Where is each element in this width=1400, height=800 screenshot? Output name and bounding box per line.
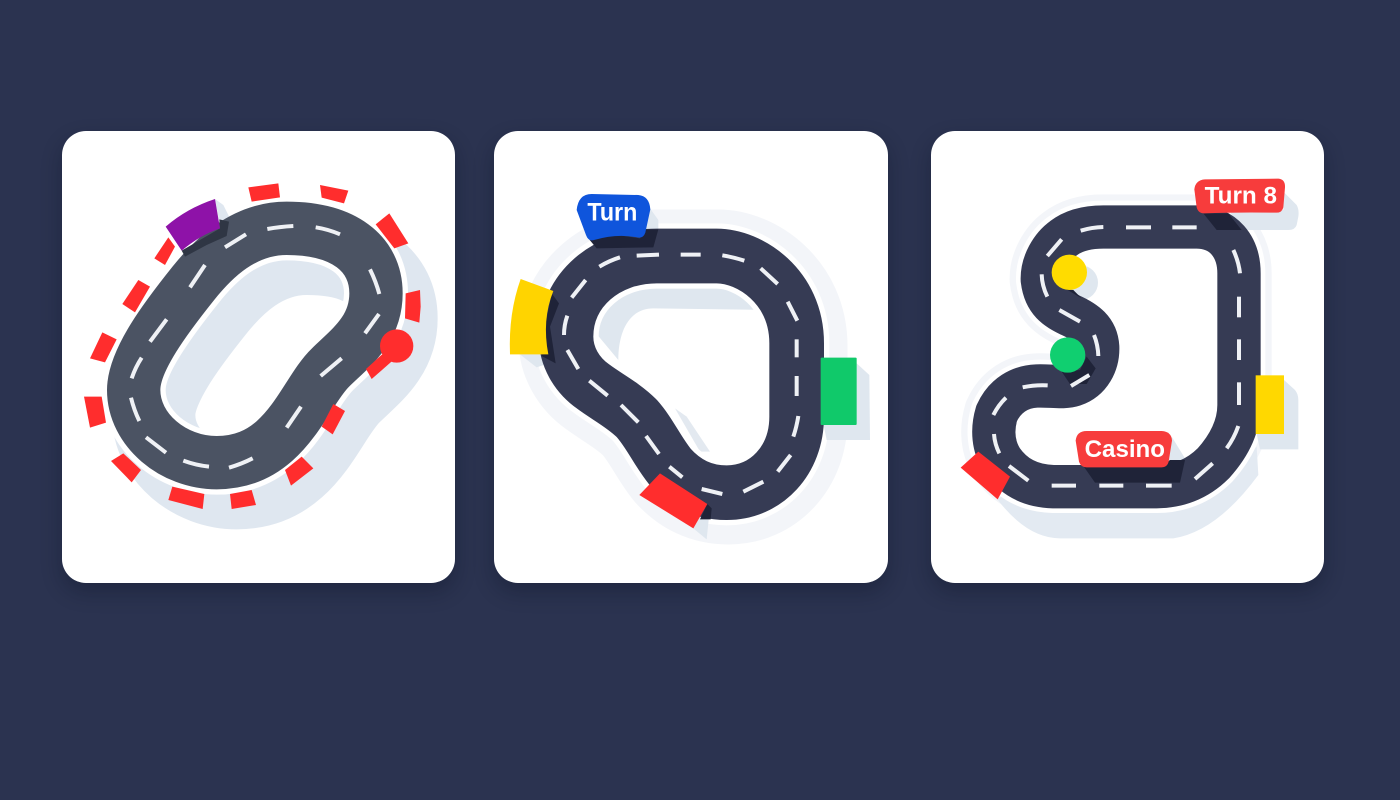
white track halo <box>134 228 376 463</box>
road <box>994 227 1239 487</box>
infield fill <box>566 256 797 493</box>
lane dashes <box>564 255 798 494</box>
sticker shadows on road <box>542 229 712 519</box>
red Casino label <box>1076 431 1172 467</box>
infield shadow sliver <box>675 408 710 452</box>
red Turn 8 label: Turn 8 <box>1205 183 1277 210</box>
infield shadow <box>593 283 768 360</box>
red sticker <box>961 452 1010 499</box>
purple sticker shadow on road <box>182 219 229 257</box>
purple sticker <box>166 199 220 251</box>
sticker shadows on road <box>1062 213 1242 483</box>
yellow sticker <box>1256 375 1284 434</box>
lane dashes <box>993 227 1240 486</box>
white track halo <box>994 227 1239 487</box>
green marker dot <box>1050 337 1085 373</box>
road <box>566 256 797 493</box>
track shadow <box>154 253 396 488</box>
red sticker <box>639 473 707 528</box>
infield fill <box>994 227 1239 487</box>
panel: oval track with red kerbs <box>62 131 455 583</box>
blue Turn label: Turn <box>587 198 637 226</box>
sticker shadow <box>215 199 230 225</box>
pale track glow <box>568 259 798 495</box>
road <box>134 228 376 463</box>
sticker shadows <box>1063 192 1299 467</box>
white track halo <box>566 256 797 493</box>
red marker dot <box>380 329 413 363</box>
yellow marker dot <box>1052 255 1087 290</box>
red kerb segments <box>84 183 421 509</box>
sticker shadows <box>520 208 870 539</box>
red Casino label: Casino <box>1085 436 1165 463</box>
blue Turn label <box>577 194 650 240</box>
track bottom shadow <box>997 447 1258 538</box>
panel: rounded triangle track with Turn label <box>494 131 888 583</box>
panel: winding track with Turn 8 and Casino labels <box>931 131 1324 583</box>
green sticker <box>821 358 857 425</box>
yellow sticker <box>510 279 553 354</box>
pale track glow <box>994 227 1239 487</box>
red Turn 8 label <box>1194 179 1285 213</box>
lane dashes <box>131 226 379 468</box>
